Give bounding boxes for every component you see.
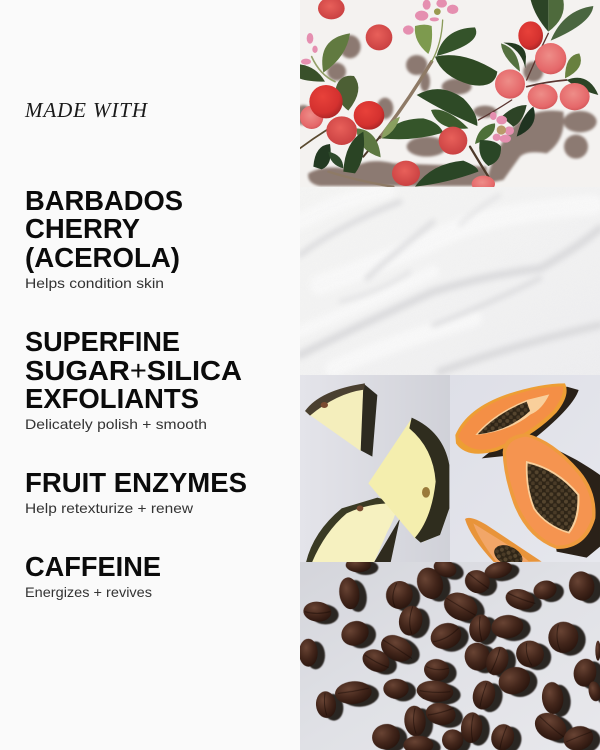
- pineapple middle slice: [368, 418, 449, 543]
- ingredient: caffeine: [25, 551, 161, 600]
- left panel background: [0, 0, 300, 750]
- ingredient: barbados cherry: CHERRY: [25, 213, 140, 244]
- flowers: [301, 0, 514, 143]
- ingredient: superfine sugar and silica exfoliants: EXFOLIANTS: [25, 383, 199, 414]
- photo panel: papaya halves: [450, 375, 600, 570]
- ingredient: barbados cherry: (ACEROLA): [25, 242, 180, 273]
- papaya top half: [455, 383, 567, 454]
- photo panel: coffee beans: [299, 557, 600, 750]
- papaya large half: [503, 433, 596, 549]
- pineapple top slice: [305, 383, 377, 457]
- ingredient: caffeine: CAFFEINE: [25, 551, 161, 582]
- ingredient: superfine sugar and silica exfoliants: Delicately polish + smooth: [25, 416, 207, 432]
- branches: [300, 20, 567, 187]
- ingredient: fruit enzymes: FRUIT ENZYMES: [25, 467, 247, 498]
- bean creases: [305, 573, 592, 748]
- papaya bottom slice: [465, 518, 542, 562]
- ingredient: fruit enzymes: [25, 467, 247, 516]
- photo panel: superfine sugar texture: [300, 187, 600, 375]
- ingredient: barbados cherry: Helps condition skin: [25, 275, 164, 291]
- cherries: [300, 0, 590, 192]
- ingredient: superfine sugar and silica exfoliants: [25, 326, 242, 432]
- ingredient: caffeine: Energizes + revives: [25, 584, 152, 600]
- ingredient: barbados cherry: [25, 185, 183, 291]
- photo panel: pineapple slices: [300, 375, 450, 562]
- photo panel: acerola cherries on branch: [295, 0, 600, 192]
- ingredient: superfine sugar and silica exfoliants: SUGAR+SILICA: [25, 355, 242, 386]
- leaves: [300, 0, 598, 187]
- pineapple bottom slice: [306, 498, 400, 562]
- ingredient: barbados cherry: BARBADOS: [25, 185, 183, 216]
- ingredient: fruit enzymes: Help retexturize + renew: [25, 500, 194, 516]
- ingredient: superfine sugar and silica exfoliants: SUPERFINE: [25, 326, 180, 357]
- title: made with: MADE WITH: [24, 98, 149, 122]
